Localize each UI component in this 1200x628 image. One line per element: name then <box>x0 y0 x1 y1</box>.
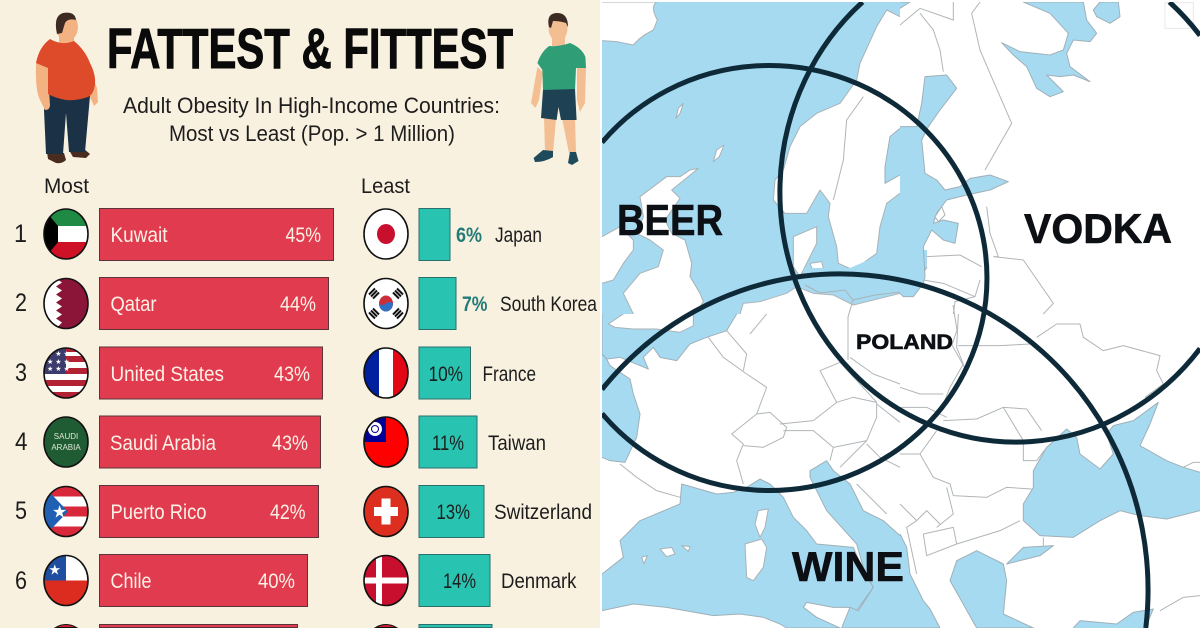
row 6: Chile <box>15 554 308 606</box>
least row 4: Taiwan: 11% <box>432 432 464 455</box>
circle: vodka <box>780 2 1200 442</box>
row 3: United States: ★ ★ ★ <box>47 358 70 366</box>
map: eastern Europe and Black Sea <box>900 314 1200 628</box>
row 6: Chile: 40% <box>258 570 295 593</box>
circle: wine <box>602 274 1148 628</box>
least row 3: France: France <box>482 363 536 386</box>
row 1: Kuwait <box>14 208 334 260</box>
least row 2: South Korea: 7% <box>462 293 488 316</box>
map: south Baltic <box>803 250 927 272</box>
row 1: Kuwait: 1 <box>14 220 27 248</box>
least row 5: Switzerland: 13% <box>436 501 470 524</box>
panel: obesity infographic <box>0 0 600 628</box>
row 3: United States: ★ ★ ★ <box>47 350 70 358</box>
least row 5: Switzerland <box>364 486 592 538</box>
row 3: United States: ★ ★ ★ <box>47 365 70 373</box>
label: wine: WINE <box>792 543 904 590</box>
row 1: Kuwait: 45% <box>286 224 321 247</box>
label: beer: BEER <box>617 196 723 245</box>
subtitle <box>123 93 500 146</box>
column heading: most: Most <box>44 175 89 198</box>
least row 4: Taiwan: Taiwan <box>488 432 546 455</box>
map: northwest Atlantic, Britain and Scandinavia <box>602 2 900 314</box>
least row 6: Denmark: 14% <box>443 570 476 593</box>
row 5: Puerto Rico: 5 <box>15 497 27 525</box>
row 4: Saudi Arabia: Saudi Arabia <box>110 432 216 455</box>
least row 3: France: 10% <box>428 363 463 386</box>
row 4: Saudi Arabia: SAUDI <box>54 432 78 441</box>
least row 4: Taiwan <box>364 416 546 468</box>
row 5: Puerto Rico: 42% <box>270 501 306 524</box>
map: south Baltic coast <box>805 267 927 300</box>
circle: beer <box>602 65 987 491</box>
row 5: Puerto Rico <box>15 486 318 538</box>
row 2: Qatar: Qatar <box>110 293 156 316</box>
subtitle: Most vs Least (Pop. > 1 Million) <box>169 121 455 146</box>
row 4: Saudi Arabia: 43% <box>272 432 308 455</box>
map borders: Poland <box>848 300 966 370</box>
map: Baltic and White Sea <box>900 2 1193 314</box>
map: western Europe and Mediterranean <box>602 314 900 628</box>
row 6: Chile: 6 <box>15 567 27 595</box>
row 5: Puerto Rico: ★ <box>52 502 67 522</box>
title: FATTEST & FITTEST <box>107 17 513 81</box>
row 5: Puerto Rico: Puerto Rico <box>110 501 206 524</box>
least row 2: South Korea: South Korea <box>500 293 597 316</box>
panel: Europe map <box>602 2 1200 628</box>
row 4: Saudi Arabia: 4 <box>15 428 28 456</box>
row 2: Qatar: 44% <box>280 293 316 316</box>
row 7: partially cropped <box>56 624 492 628</box>
row 2: Qatar: 2 <box>15 289 27 317</box>
row 6: Chile: ★ <box>48 562 61 578</box>
least row 1: Japan <box>364 208 542 260</box>
least row 3: France <box>364 347 536 399</box>
label: Poland: POLAND <box>856 331 953 354</box>
row 4: Saudi Arabia <box>15 416 320 468</box>
subtitle: Adult Obesity In High-Income Countries: <box>123 93 500 118</box>
least row 5: Switzerland: Switzerland <box>494 501 592 524</box>
column heading: least: Least <box>361 175 410 198</box>
least row 1: Japan: 6% <box>456 224 482 247</box>
row 1: Kuwait: Kuwait <box>110 224 168 247</box>
least row 1: Japan: Japan <box>495 224 542 247</box>
row 3: United States: 43% <box>274 363 310 386</box>
row 3: United States <box>15 347 322 399</box>
icon: overweight man <box>36 13 98 163</box>
least row 6: Denmark <box>364 554 577 606</box>
row 6: Chile: Chile <box>110 570 152 593</box>
row 2: Qatar <box>15 278 328 330</box>
icon: fit man <box>531 13 586 165</box>
least row 2: South Korea <box>364 278 597 330</box>
row 3: United States: United States <box>110 363 224 386</box>
row 3: United States: 3 <box>15 359 27 387</box>
least row 6: Denmark: Denmark <box>501 570 577 593</box>
label: vodka: VODKA <box>1024 205 1172 252</box>
row 4: Saudi Arabia: ARABIA <box>51 443 81 452</box>
